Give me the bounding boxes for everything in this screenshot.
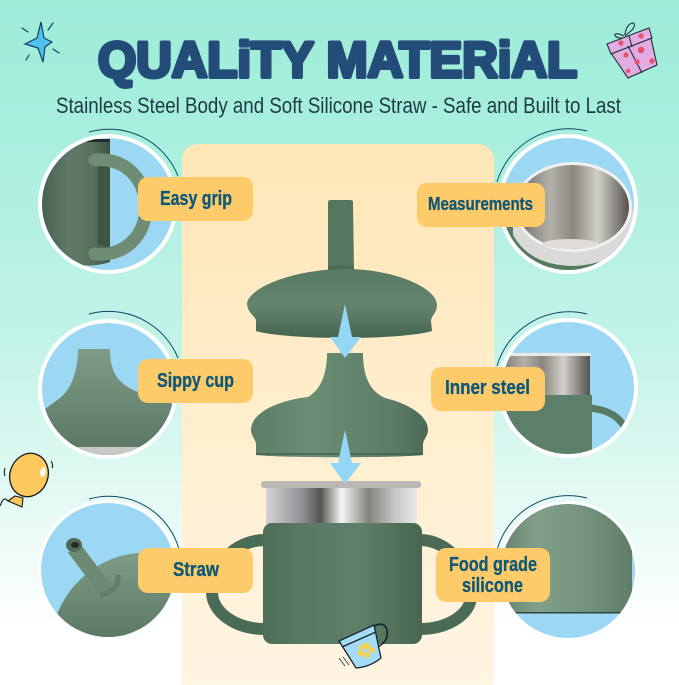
icon: gift box (607, 23, 657, 78)
zoom circle: straw (38, 496, 180, 637)
zoom circle: sippy cup (38, 310, 178, 459)
label: Inner steel (431, 367, 545, 411)
label: Sippy cup: Sippy cup (157, 370, 234, 392)
label: Food grade silicone (436, 548, 550, 602)
sippy lid (251, 353, 428, 457)
label: Food grade silicone: silicone (462, 575, 523, 597)
label: Sippy cup (138, 359, 253, 403)
label: Food grade silicone: Food grade (449, 554, 537, 576)
label: Measurements (417, 183, 545, 227)
arrow: lid to sippy (330, 304, 361, 358)
icon: small cup (339, 624, 387, 668)
label: Straw (138, 548, 253, 593)
label: Inner steel: Inner steel (445, 377, 530, 399)
center panel (182, 144, 494, 685)
straw lid (247, 200, 437, 338)
title: QUALiTY MATERiAL (98, 32, 577, 88)
label: Easy grip: Easy grip (160, 188, 232, 210)
zoom circle: easy grip (30, 129, 178, 274)
label: Measurements: Measurements (428, 194, 533, 214)
label: Straw: Straw (173, 559, 219, 581)
cup with handles (212, 481, 471, 644)
icon: sparkle star (22, 22, 59, 62)
zoom circle: inner steel (495, 312, 638, 465)
icon: balloon (0, 448, 54, 507)
zoom circle: food grade silicone (495, 495, 638, 641)
arrow: sippy to cup (330, 430, 361, 484)
zoom circle: measurements (497, 129, 640, 275)
label: Easy grip (138, 177, 253, 221)
